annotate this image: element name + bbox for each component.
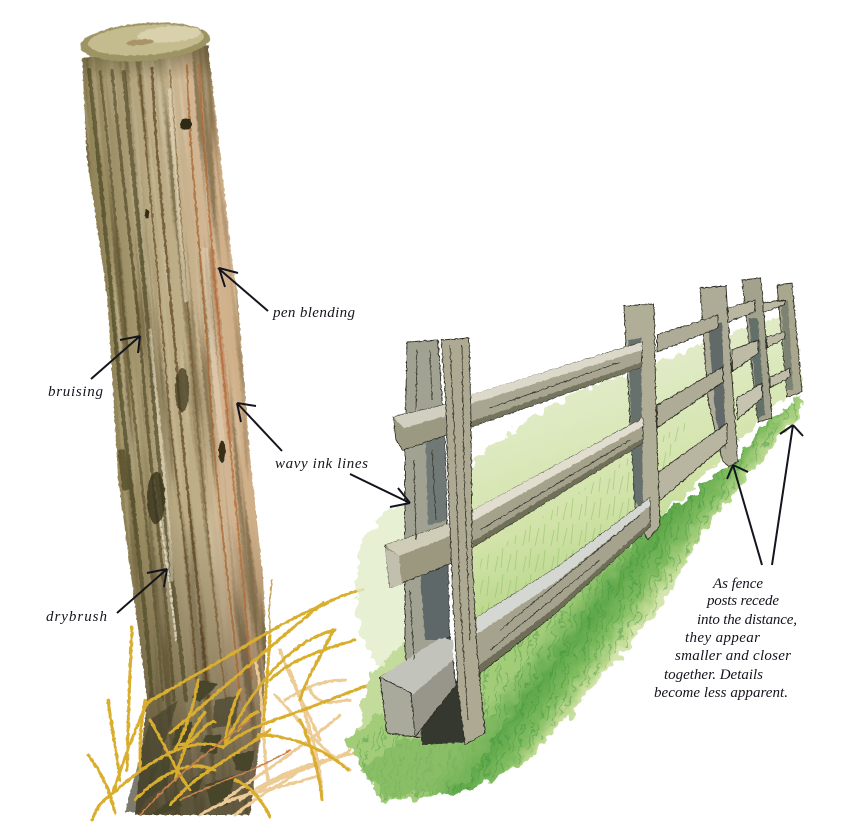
lower left green patch bbox=[360, 710, 510, 797]
post top bbox=[79, 19, 211, 65]
label: pen blending bbox=[218, 268, 356, 321]
callout: fence posts recede: they appear bbox=[685, 630, 760, 646]
dark base patches bbox=[125, 680, 255, 815]
label: drybrush bbox=[46, 569, 167, 625]
pale orange strands bbox=[200, 650, 360, 815]
rail stubs bbox=[393, 403, 453, 450]
callout: fence posts recede: together. Details bbox=[664, 667, 763, 683]
callout: fence posts recede bbox=[654, 425, 803, 701]
dry yellow grass at post base bbox=[88, 580, 377, 820]
post body bbox=[82, 44, 266, 816]
label: bruising: bruising bbox=[48, 384, 104, 400]
wood grain streaks bbox=[89, 65, 252, 700]
callout: fence posts recede: As fence bbox=[712, 576, 763, 592]
yellow stalks bbox=[88, 590, 377, 820]
callout: fence posts recede: posts recede bbox=[706, 593, 779, 609]
meadow wash bbox=[345, 312, 802, 802]
label: bruising bbox=[48, 336, 140, 400]
callout: fence posts recede: become less apparent. bbox=[654, 685, 788, 701]
label: drybrush: drybrush bbox=[46, 609, 107, 625]
split rail fence bbox=[380, 278, 802, 745]
far post 3 bbox=[700, 286, 738, 467]
label: wavy ink lines: wavy ink lines bbox=[275, 456, 368, 472]
bright foreground grass bbox=[345, 395, 802, 802]
far rails bbox=[657, 300, 790, 503]
left side wash bbox=[355, 505, 425, 680]
far post 5 bbox=[777, 283, 802, 397]
label: pen blending: pen blending bbox=[272, 305, 356, 321]
callout: fence posts recede: smaller and closer bbox=[675, 648, 791, 664]
far post 4 bbox=[742, 278, 772, 422]
rear front post bbox=[405, 340, 452, 740]
middle post bbox=[624, 304, 660, 540]
front post bbox=[441, 338, 485, 745]
knots bbox=[180, 118, 192, 130]
callout: fence posts recede: into the distance, bbox=[697, 612, 797, 628]
ink lines on rails bbox=[480, 362, 640, 650]
long front rails bbox=[465, 342, 642, 429]
pale green background bbox=[460, 312, 802, 670]
wooden post illustration bbox=[80, 22, 266, 816]
label: wavy ink lines bbox=[237, 403, 410, 507]
